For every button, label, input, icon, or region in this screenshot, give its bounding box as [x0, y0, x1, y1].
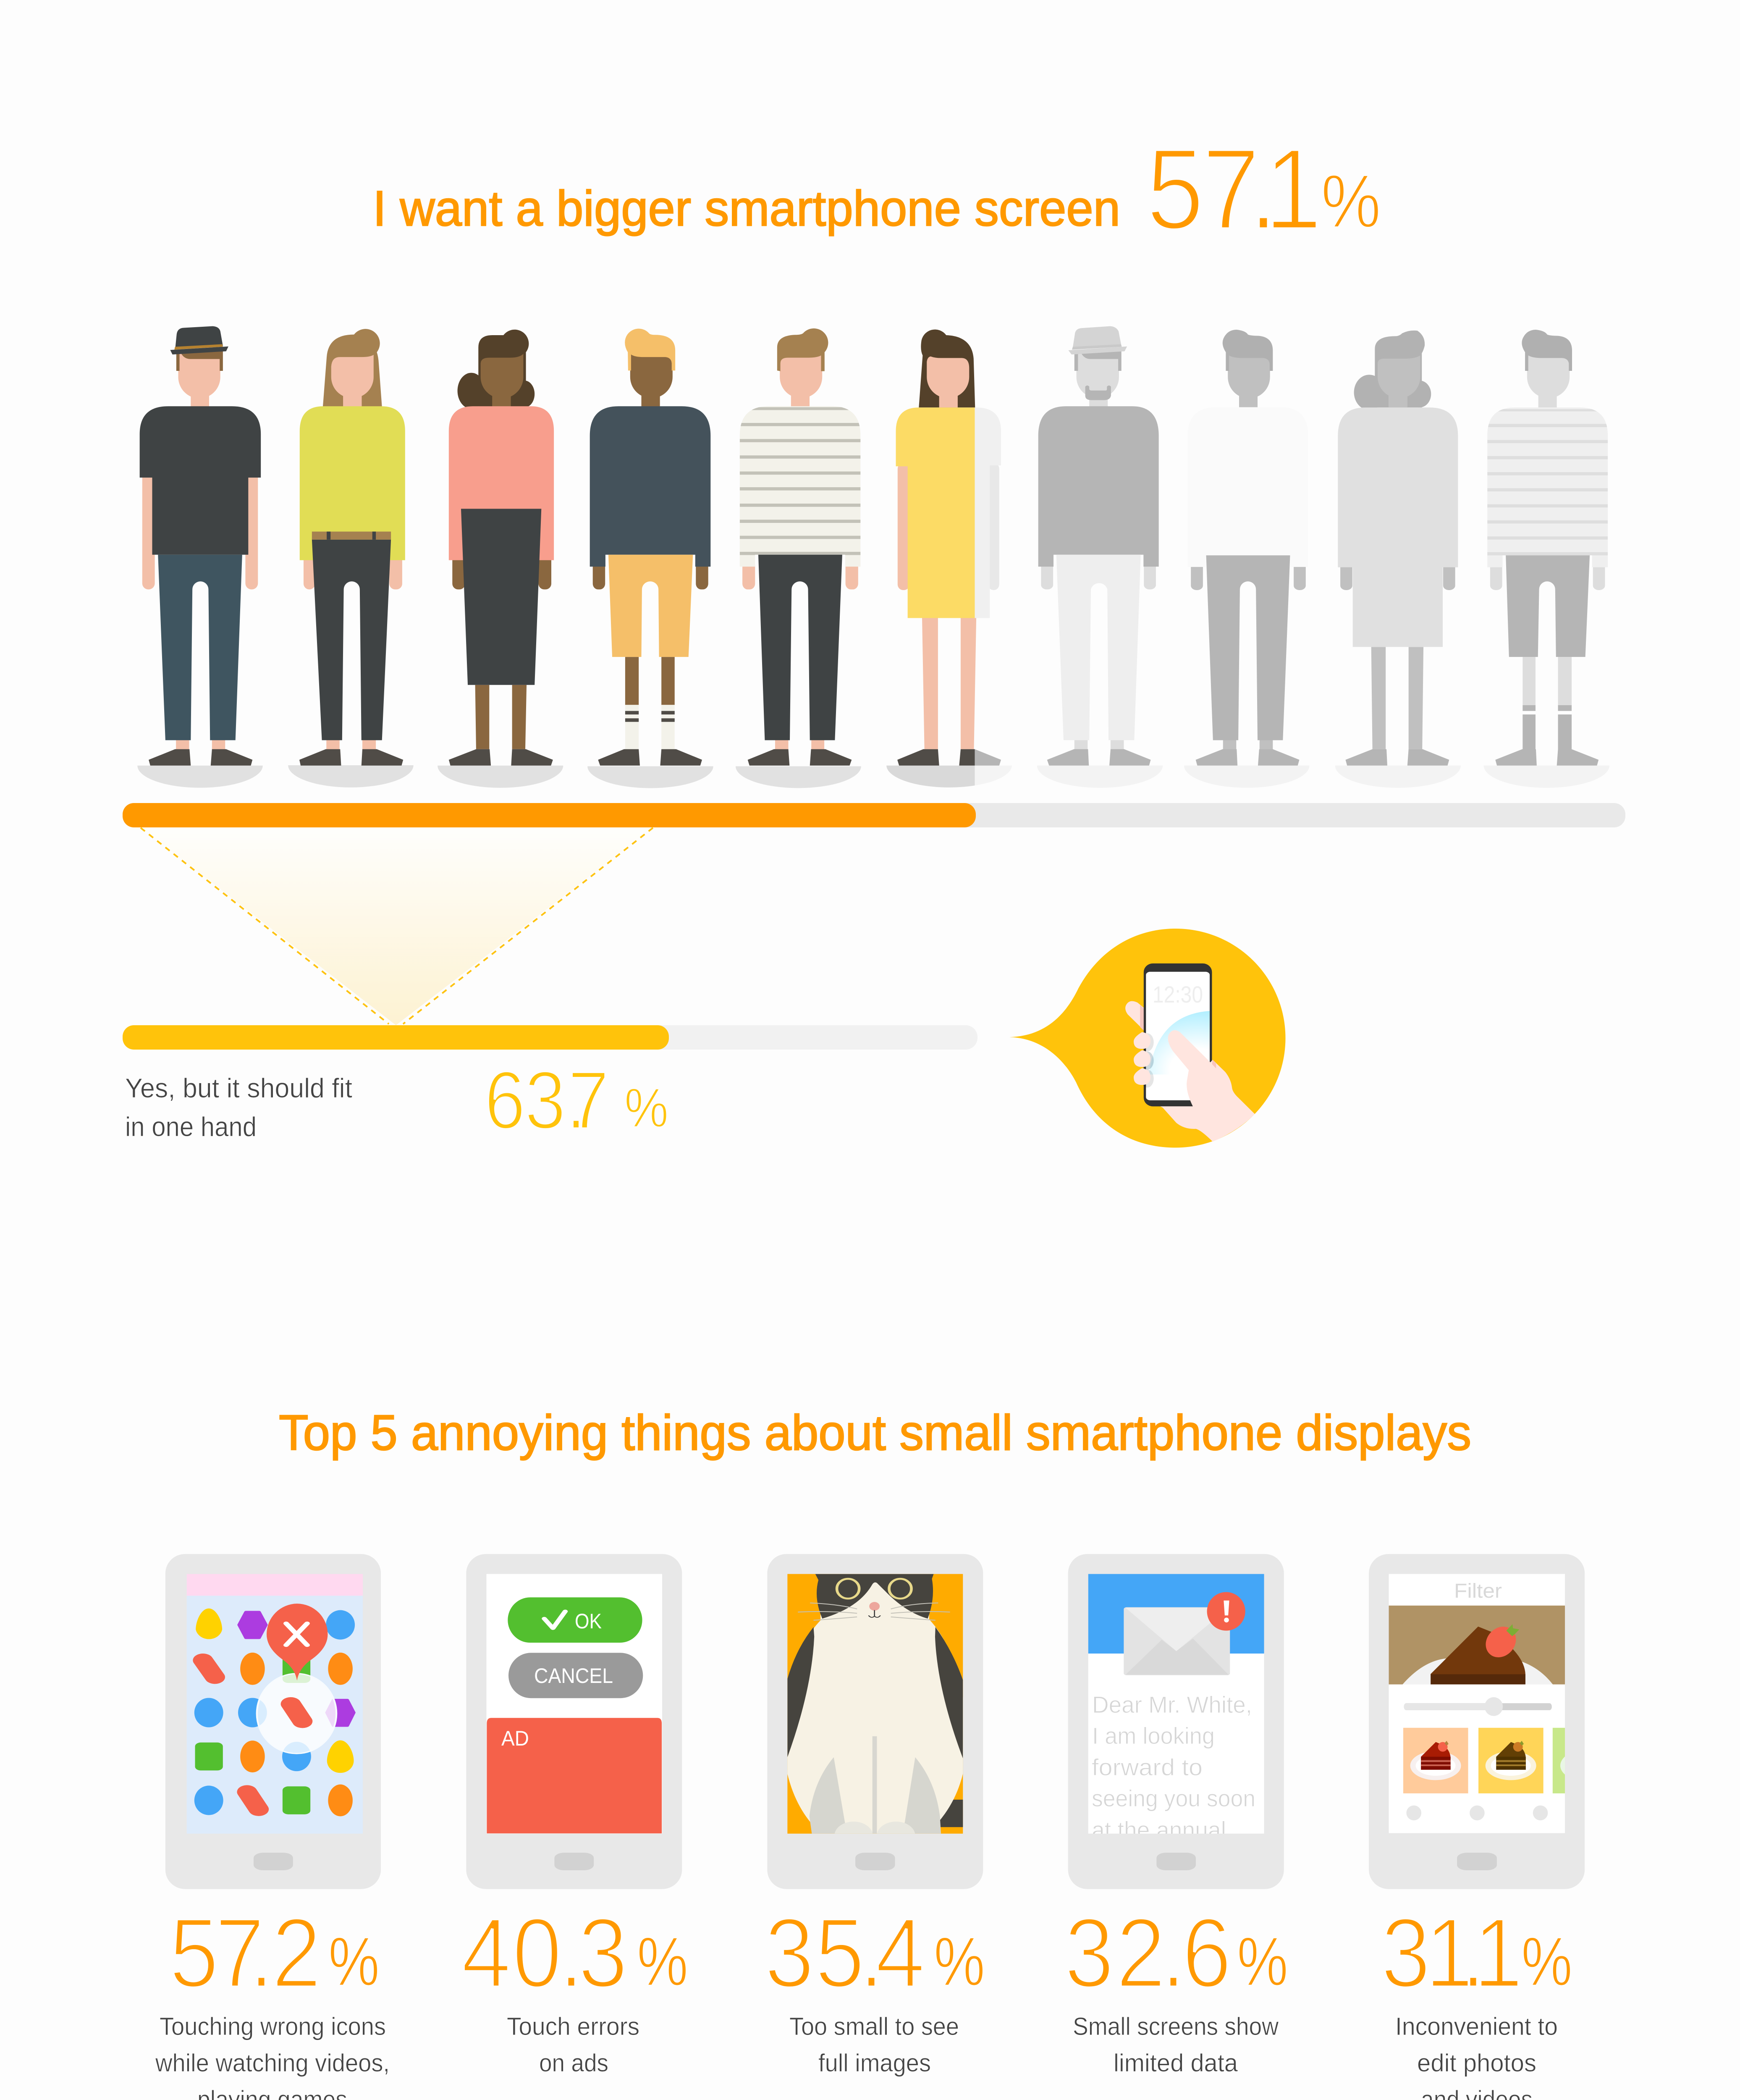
stat: 57.2% touching wrong icons: Touching wrong icons — [160, 2013, 386, 2040]
panel: phone 2 ad touch errors — [466, 1554, 682, 1889]
figure row: ten people — [137, 326, 1609, 788]
panel: phone 3 cat image too big for the screen — [767, 1554, 983, 1889]
phone body, buttons and ad block — [466, 1554, 682, 1889]
panel: phone 2 ad touch errors: OK — [575, 1609, 602, 1633]
stat: 32.6% small screens show limited data — [1064, 1898, 1288, 2077]
stat: 31.1% inconvenient to edit photos and videos: edit photos — [1417, 2049, 1536, 2077]
stat: 31.1% inconvenient to edit photos and videos — [1381, 1898, 1572, 2100]
stat: 31.1% inconvenient to edit photos and videos: Inconvenient to — [1395, 2013, 1558, 2040]
stat: 35.4% too small to see full images: Too small to see — [789, 2013, 959, 2040]
title: I want a bigger smartphone screen 57.1%: % — [1321, 159, 1381, 244]
person 4: man in shorts, coloured — [587, 328, 713, 788]
stat: 32.6% small screens show limited data: 32.6 — [1064, 1898, 1232, 2008]
stat: 32.6% small screens show limited data: Small screens show — [1073, 2013, 1279, 2040]
stat: 57.2% touching wrong icons: while watching videos, — [155, 2049, 390, 2077]
person 1: man in hat, coloured — [137, 326, 263, 788]
panel: phone 2 ad touch errors: CANCEL — [534, 1664, 613, 1688]
hand fingers and thumb — [1134, 1030, 1255, 1142]
bubble, phone body and screen — [1009, 929, 1286, 1148]
stat: 31.1% inconvenient to edit photos and videos: 31.1 — [1381, 1898, 1523, 2008]
stat: 40.3% touch errors on ads — [461, 1898, 688, 2077]
person 5: man in striped sweater, coloured — [736, 328, 861, 788]
clock on phone: 12:30 — [1153, 981, 1203, 1008]
funnel: zoom from orange bar into yellow bar — [141, 827, 653, 1025]
person 6: woman in half-yellow dress, split point of the bar — [886, 329, 1012, 788]
stat: 35.4% too small to see full images — [765, 1898, 985, 2077]
panel: phone 5 photo filter app — [1369, 1554, 1585, 1889]
text: Yes, but it should fit in one hand: in one hand — [125, 1111, 257, 1142]
email text clipped by screen: Dear Mr. White, — [1092, 1691, 1252, 1718]
person 2: woman in yellow top, coloured — [288, 329, 414, 788]
stat: 40.3% touch errors on ads: on ads — [539, 2049, 608, 2077]
person 10: man in striped sweater and shorts, grey — [1484, 330, 1609, 788]
title: I want a bigger smartphone screen 57.1% — [373, 125, 1381, 254]
email text clipped by screen: I am looking — [1092, 1722, 1215, 1749]
person 3: woman in skirt, coloured — [438, 330, 563, 788]
stat: 63.7% — [485, 1054, 668, 1146]
stat: 32.6% small screens show limited data: % — [1237, 1923, 1288, 2000]
panel: phone 1 game with wrong icon touch — [165, 1554, 381, 1889]
email text clipped by screen: seeing you soon — [1092, 1785, 1255, 1811]
stat: 40.3% touch errors on ads: 40.3 — [461, 1898, 628, 2008]
panel: phone 2 ad touch errors: AD — [501, 1727, 529, 1750]
phone body, photo, slider and filter thumbnails — [1369, 1554, 1585, 1889]
stat: 63.7%: % — [624, 1077, 668, 1139]
person 8: man in white sweater, grey — [1184, 330, 1309, 788]
panel: phone 4 email limited data — [1068, 1554, 1284, 1889]
callout: hand holding phone in yellow speech bubble — [1009, 929, 1286, 1148]
progress bar: 63.7% one hand — [123, 1025, 977, 1050]
person 7: man in hat, grey — [1037, 326, 1163, 788]
title: I want a bigger smartphone screen 57.1%: 57.1 — [1146, 125, 1322, 254]
heading: Top 5 annoying things: Top 5 annoying things about small smartphone displays — [279, 1405, 1471, 1461]
stat: 57.2% touching wrong icons — [155, 1898, 390, 2100]
stat: 57.2% touching wrong icons: % — [328, 1923, 380, 2000]
stat: 32.6% small screens show limited data: limited data — [1114, 2049, 1238, 2077]
text: Yes, but it should fit in one hand: Yes, but it should fit — [125, 1073, 352, 1103]
email text clipped by screen: forward to — [1092, 1754, 1203, 1780]
phone body, header and envelope — [1068, 1554, 1284, 1889]
email text clipped by screen: at the annual — [1092, 1816, 1226, 1843]
stat: 35.4% too small to see full images: 35.4 — [765, 1898, 925, 2008]
progress bar: 57.1% of all — [123, 803, 1625, 827]
stat: 40.3% touch errors on ads: Touch errors — [507, 2013, 639, 2040]
text: Yes, but it should fit in one hand — [125, 1073, 352, 1142]
stat: 35.4% too small to see full images: % — [934, 1923, 985, 2000]
phone body and game screen — [165, 1554, 381, 1889]
stat: 31.1% inconvenient to edit photos and videos: % — [1521, 1923, 1572, 2000]
panel: phone 5 photo filter app: Filter — [1454, 1580, 1502, 1602]
email text clipped by screen — [1092, 1696, 1254, 1834]
stat: 40.3% touch errors on ads: % — [637, 1923, 688, 2000]
stat: 35.4% too small to see full images: full images — [818, 2049, 931, 2077]
stat: 63.7%: 63.7 — [485, 1054, 609, 1146]
title: I want a bigger smartphone screen 57.1%: I want a bigger smartphone screen — [373, 181, 1120, 236]
phone body and cat illustration — [767, 1554, 983, 1889]
person 9: woman in dress, grey — [1335, 331, 1461, 788]
stat: 57.2% touching wrong icons: 57.2 — [169, 1898, 321, 2008]
